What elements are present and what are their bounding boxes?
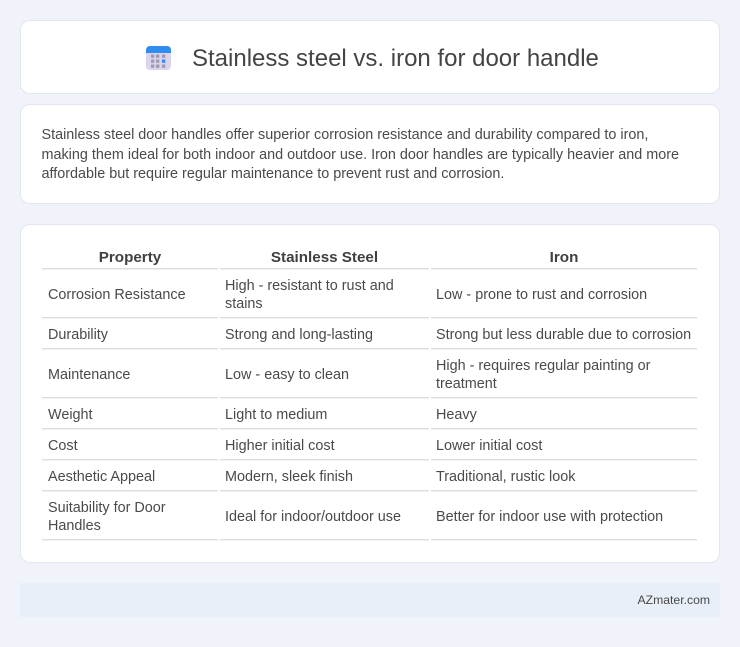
comparison table: High - requires regular painting or — [436, 358, 650, 374]
comparison table: Light to medium — [225, 407, 327, 423]
comparison table: Modern, sleek finish — [225, 469, 353, 485]
column header: Iron: Iron — [550, 249, 578, 266]
comparison table: Durability — [48, 327, 108, 343]
comparison table: Aesthetic Appeal — [48, 469, 155, 485]
comparison table: Cost — [48, 438, 78, 454]
comparison table: Strong and long-lasting — [225, 327, 373, 343]
comparison table: Weight — [48, 407, 93, 423]
comparison table: Higher initial cost — [225, 438, 335, 454]
comparison table: stains — [225, 296, 263, 312]
intro text — [42, 127, 679, 182]
comparison table: Low - easy to clean — [225, 367, 349, 383]
comparison table: Low - prone to rust and corrosion — [436, 287, 647, 303]
comparison table: Strong but less durable due to corrosion — [436, 327, 691, 343]
comparison table: Ideal for indoor/outdoor use — [225, 509, 401, 525]
intro text: Stainless steel door handles offer superior corrosion resistance and durability compared to iron, — [42, 127, 648, 143]
column header: Stainless Steel: Stainless Steel — [271, 249, 378, 266]
table card — [20, 224, 720, 563]
icon: calendar — [146, 46, 171, 70]
column header: Property: Property — [99, 249, 161, 266]
comparison table: Better for indoor use with protection — [436, 509, 663, 525]
footer text: AZmater.com — [638, 593, 710, 607]
comparison table: Corrosion Resistance — [48, 287, 186, 303]
comparison table: Heavy — [436, 407, 477, 423]
comparison table: Handles — [48, 518, 101, 534]
comparison table: Suitability for Door — [48, 500, 166, 516]
intro card — [20, 104, 720, 204]
intro text: making them ideal for both indoor and outdoor use. Iron door handles are typically heavier and more — [42, 146, 679, 162]
comparison table: Maintenance — [48, 367, 130, 383]
intro text: affordable but require regular maintenance to prevent rust and corrosion. — [42, 166, 504, 182]
title: Stainless steel vs. iron for door handle — [192, 45, 599, 72]
comparison table: Lower initial cost — [436, 438, 542, 454]
comparison table: High - resistant to rust and — [225, 278, 394, 294]
title card — [20, 20, 720, 94]
footer bar — [20, 583, 720, 617]
comparison table: treatment — [436, 376, 497, 392]
comparison table: Traditional, rustic look — [436, 469, 575, 485]
